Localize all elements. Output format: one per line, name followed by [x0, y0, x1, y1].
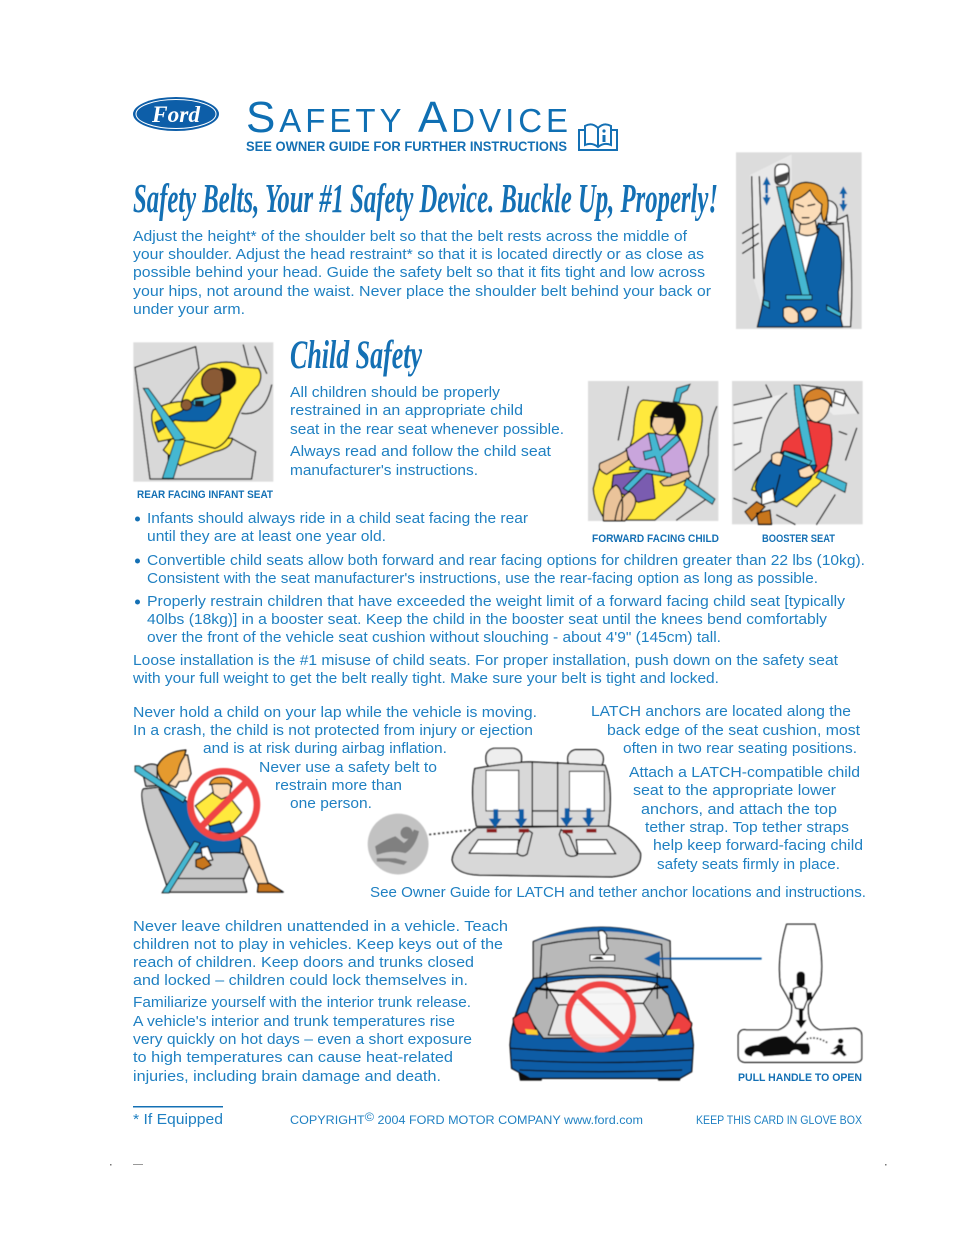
text block: safety belt instructions: your shoulder. Adjust the head restraint* so that it is located directly or as close as [133, 246, 704, 263]
icon: Ford logo [133, 97, 219, 131]
text block: loose installation: with your full weight to get the belt really tight. Make sure your belt is tight and locked. [132, 670, 719, 687]
text block: LATCH anchors [591, 703, 863, 873]
illustration: car with open trunk [510, 927, 762, 1081]
bullet list: child restraint rules: until they are at least one year old. [147, 528, 386, 545]
bullet list: child restraint rules: Convertible child seats allow both forward and rear facing options for children greater than 22 lbs (10kg). [147, 552, 865, 569]
text block: never hold a child: restrain more than [275, 777, 402, 794]
text block: child safety intro: All children should be properly [290, 384, 501, 401]
text block: never leave children unattended: A vehicle's interior and trunk temperatures rise [133, 1013, 455, 1030]
text block: never leave children unattended: reach of children. Keep doors and trunks closed [133, 954, 474, 971]
text block: LATCH anchors: often in two rear seating positions. [623, 740, 857, 757]
text block: LATCH anchors: back edge of the seat cushion, most [607, 722, 861, 739]
text block: never hold a child: Never hold a child on your lap while the vehicle is moving. [133, 704, 537, 721]
illustration: forward facing child seat [588, 381, 718, 521]
text block: child safety intro: seat in the rear seat whenever possible. [290, 421, 564, 438]
illustration: rear facing infant seat [133, 342, 273, 482]
copyright: COPYRIGHT [290, 1113, 361, 1127]
bullet list: child restraint rules [135, 510, 865, 646]
copyright: 2004 FORD MOTOR COMPANY www.ford.com [374, 1113, 643, 1127]
text block: LATCH anchors: LATCH anchors are located along the [591, 703, 851, 720]
label: booster seat: BOOSTER SEAT [762, 533, 835, 545]
text: see owner guide for LATCH: See Owner Guide for LATCH and tether anchor locations and instructions. [370, 884, 866, 901]
bullet list: child restraint rules: Consistent with the seat manufacturer's instructions, use the rear-facing option as long as possible. [147, 570, 818, 587]
text block: child safety intro: restrained in an appropriate child [290, 402, 523, 419]
text block: never leave children unattended: injuries, including brain damage and death. [133, 1068, 441, 1085]
text block: LATCH anchors: Attach a LATCH-compatible child [629, 764, 860, 781]
text block: child safety intro [290, 384, 564, 479]
text block: safety belt instructions: Adjust the height* of the shoulder belt so that the belt rests across the middle of [133, 228, 688, 245]
text block: never leave children unattended: to high temperatures can cause heat-related [133, 1049, 453, 1066]
label: forward facing child: FORWARD FACING CHILD [592, 533, 719, 545]
text block: never leave children unattended: Familiarize yourself with the interior trunk release. [133, 994, 471, 1011]
text block: LATCH anchors: help keep forward-facing child [653, 837, 863, 854]
illustration: belted woman [736, 152, 862, 329]
bullet list: child restraint rules: over the front of the vehicle seat cushion without slouching - about 4'9" (145cm) tall. [147, 629, 721, 646]
text block: loose installation [132, 652, 839, 687]
text block: LATCH anchors: safety seats firmly in place. [657, 856, 840, 873]
heading: child safety: Child Safety [290, 332, 422, 377]
icon: LATCH symbol [368, 814, 429, 874]
text block: safety belt instructions [133, 228, 711, 318]
illustration: adult holding child, prohibited [135, 750, 283, 893]
text block: never hold a child: one person. [290, 795, 372, 812]
text block: LATCH anchors: anchors, and attach the top [641, 801, 837, 818]
bullet list: child restraint rules: Properly restrain children that have exceeded the weight limit of a forward facing child seat [typically [147, 593, 846, 610]
text block: never hold a child [133, 704, 537, 812]
text block: LATCH anchors: tether strap. Top tether straps [645, 819, 849, 836]
bullet list: child restraint rules: Infants should always ride in a child seat facing the rear [147, 510, 528, 527]
label: pull handle to open: PULL HANDLE TO OPEN [738, 1072, 862, 1084]
illustration: LATCH anchors in rear seat [429, 748, 641, 877]
text block: never hold a child: Never use a safety belt to [259, 759, 437, 776]
text block: never leave children unattended: Never leave children unattended in a vehicle. Teach [133, 918, 508, 935]
copyright: © [365, 1110, 374, 1124]
footnote: * If Equipped [133, 1111, 223, 1128]
icon: Ford logo: Ford [151, 102, 201, 127]
text block: never hold a child: and is at risk during airbag inflation. [203, 740, 447, 757]
subtitle: SEE OWNER GUIDE FOR FURTHER INSTRUCTIONS [246, 139, 567, 154]
text block: safety belt instructions: possible behind your head. Guide the safety belt so that it fits tight and low across [133, 264, 705, 281]
label: rear facing infant seat: REAR FACING INFANT SEAT [137, 489, 273, 501]
illustration: trunk release handle [738, 924, 862, 1062]
text block: LATCH anchors: seat to the appropriate lower [633, 782, 836, 799]
text block: never hold a child: In a crash, the child is not protected from injury or ejection [133, 722, 533, 739]
text block: safety belt instructions: under your arm. [133, 301, 245, 318]
bullet list: child restraint rules: 40lbs (18kg)] in a booster seat. Keep the child in the booster seat until the knees bend comfortably [147, 611, 828, 628]
text block: never leave children unattended: and locked – children could lock themselves in. [133, 972, 468, 989]
icon: information book [579, 124, 617, 150]
glove box note: KEEP THIS CARD IN GLOVE BOX [696, 1113, 862, 1127]
text block: never leave children unattended: very quickly on hot days – even a short exposure [133, 1031, 472, 1048]
text block: loose installation: Loose installation is the #1 misuse of child seats. For proper installation, push down on the safety seat [133, 652, 839, 669]
text block: safety belt instructions: your hips, not around the waist. Never place the shoulder belt behind your back or [133, 283, 711, 300]
text block: never leave children unattended: children not to play in vehicles. Keep keys out of the [133, 936, 503, 953]
text block: child safety intro: Always read and follow the child seat [290, 443, 552, 460]
text block: child safety intro: manufacturer's instructions. [290, 462, 478, 479]
footer rule [133, 1106, 223, 1108]
illustration: booster seat [732, 381, 863, 524]
title: SAFETY ADVICE [246, 93, 568, 142]
text block: never leave children unattended [133, 918, 508, 1085]
